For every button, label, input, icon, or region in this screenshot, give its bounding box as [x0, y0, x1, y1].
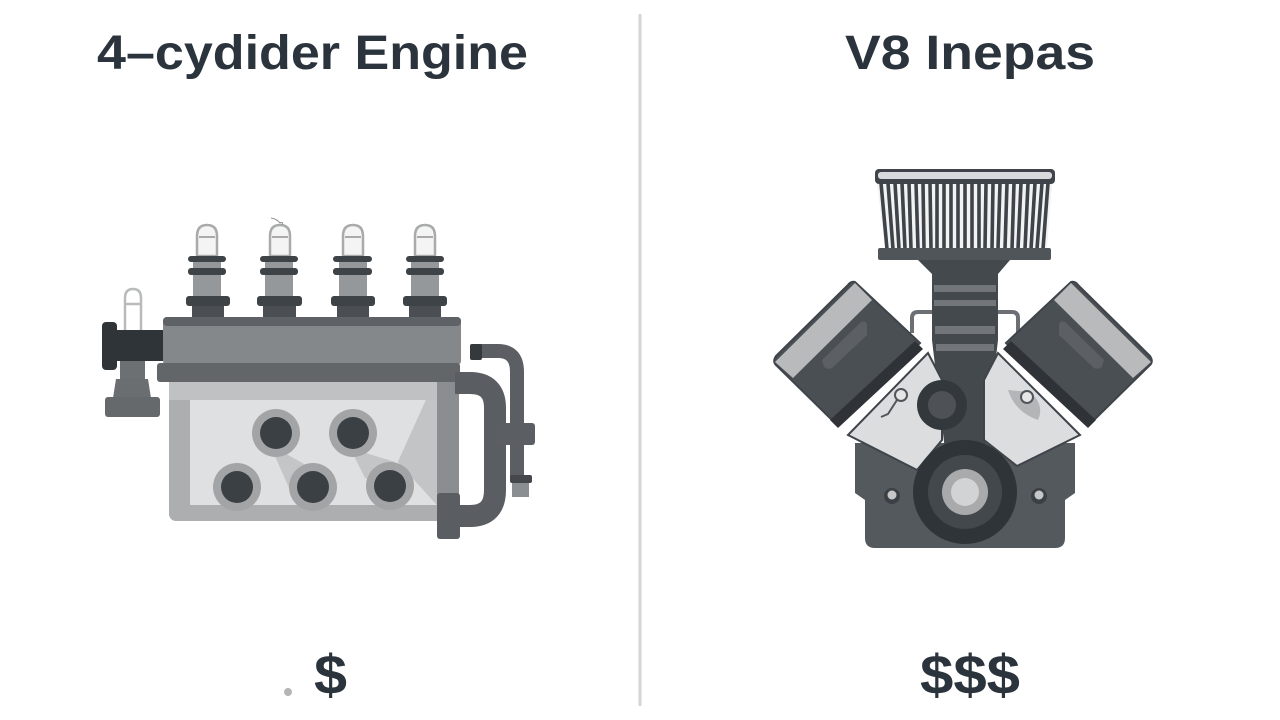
intake neck: [918, 260, 1010, 450]
icon: 4-cylinder engine: [102, 218, 535, 539]
right cylinder bank: [984, 282, 1152, 466]
spark plug 2: [257, 218, 302, 318]
cylinder head: [157, 317, 461, 382]
engine crankcase: [855, 443, 1075, 548]
left cylinder bank: [774, 282, 942, 470]
spark plug 3: [331, 225, 375, 318]
bracket: [912, 312, 1018, 333]
rear thin pipe: [470, 344, 532, 497]
icon: V8 engine: [774, 169, 1152, 548]
spark plug 4: [403, 225, 447, 318]
idler pulley: [917, 380, 967, 430]
engine block: [169, 380, 459, 521]
air filter: [875, 169, 1055, 260]
spark plugs row: [186, 218, 447, 318]
heading: V8 engine: V8 Inepas: [845, 27, 1095, 80]
crank pulley: [913, 440, 1017, 544]
cost label: V8: $$$: [920, 643, 1020, 706]
coolant pipe: [437, 383, 535, 539]
cylinder bores: [213, 409, 414, 511]
heading: 4-cylinder engine: 4–cydider Engine: [97, 27, 528, 80]
spark plug 1: [186, 225, 230, 318]
small left spark plug: [125, 289, 141, 330]
cost marker: small dot: [284, 688, 292, 696]
cost label: 4-cylinder: $: [314, 643, 347, 706]
mounting bolts: [884, 488, 1047, 504]
left intake and mount: [102, 322, 164, 417]
